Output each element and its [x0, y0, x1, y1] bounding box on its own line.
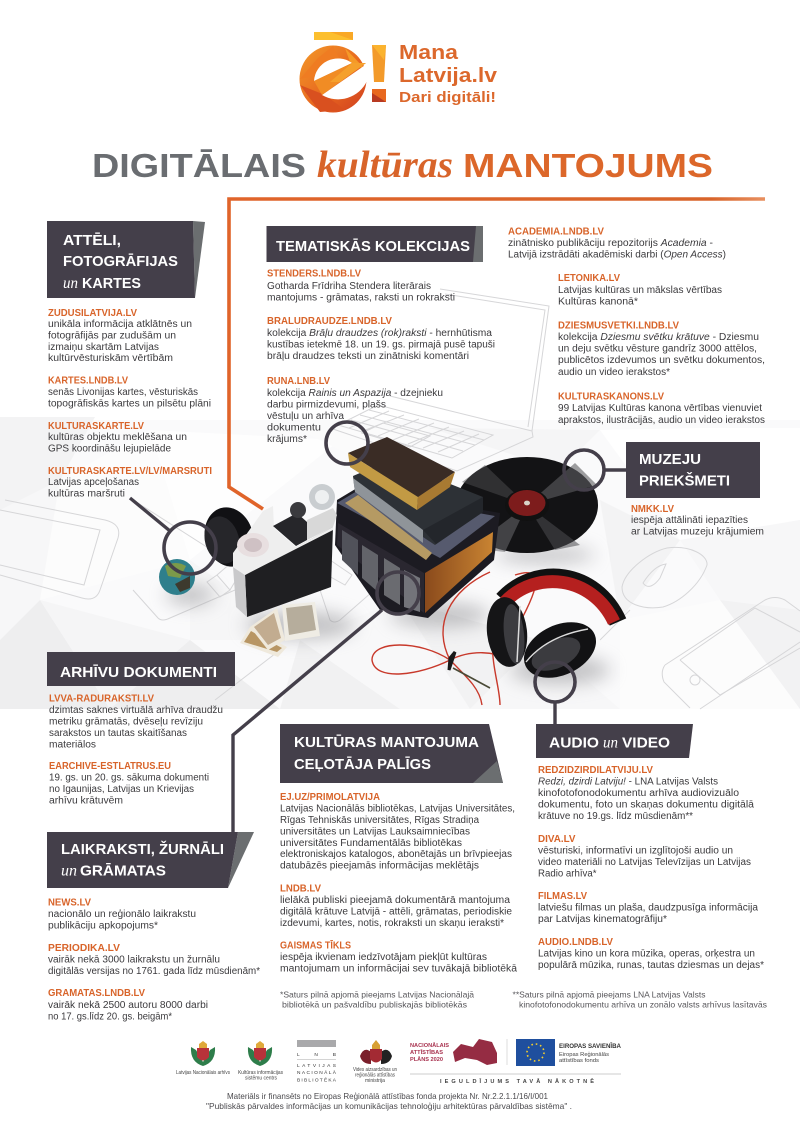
- text block: lvva: LVVA-RADURAKSTI.LV: [49, 694, 154, 704]
- text block: zudusilatvija: [48, 308, 192, 364]
- text block: letonika: Latvijas kultūras un mākslas vērtības: [558, 285, 722, 296]
- text block: redzidzirdilatviju: REDZIDZIRDILATVIJU.LV: [538, 765, 653, 776]
- text block: news: nacionālo un reģionālo laikrakstu: [48, 907, 196, 920]
- text block: braludraudze: kolekcija Brāļu draudzes (rok)raksti - hernhūtisma: [267, 328, 492, 339]
- text block: news: publikāciju apkopojums*: [48, 920, 158, 932]
- text block: lvva: dzimtas saknes virtuālā arhīva draudžu: [49, 705, 223, 716]
- logo: Latvijas Nacionālā bibliotēka: NACIONĀLĀ: [297, 1069, 337, 1076]
- logo: EU flag and Eiropas Savienība: attīstības fonds: [559, 1058, 599, 1064]
- shadows under objects: [166, 547, 610, 684]
- illustration: small old book: [348, 437, 455, 510]
- footnote: single asterisk: *Saturs pilnā apjomā pieejams Latvijas Nacionālajā: [280, 990, 474, 1000]
- text block: lndb: LNDB.LV: [280, 884, 321, 894]
- illustration: camera: [198, 484, 337, 617]
- text block: ej.uz/primolatvija: Latvijas Nacionālās bibliotēkas, Latvijas Universitātes,: [280, 804, 515, 814]
- text block: dziesmusvetki: un deju svētku vēsture gandrīz 3000 attēlos,: [558, 344, 757, 354]
- text block: redzidzirdilatviju: Redzi, dzirdi Latviju! - LNA Latvijas Valsts: [538, 776, 718, 788]
- text block: dziesmusvetki: publicētos izdevumos un svētku dokumentos,: [558, 355, 765, 366]
- text block: earchive: no Igaunijas, Latvijas un Krievijas: [49, 784, 194, 795]
- text block: gramatas: vairāk nekā 2500 autoru 8000 darbi: [48, 1000, 208, 1011]
- text block: academia: zinātnisko publikāciju repozitorijs Academia -: [508, 238, 713, 249]
- text block: redzidzirdilatviju: dokumentu, foto un skaņas dokumentu digitālā: [538, 800, 754, 810]
- title: [92, 144, 713, 186]
- panel: tematiskās kolekcijas: [266, 226, 495, 445]
- text block: runa: RUNA.LNB.LV: [267, 376, 330, 387]
- text block: kartes: senās Livonijas kartes, vēsturiskās: [48, 387, 198, 398]
- logo: Latvijas Nacionālā bibliotēka: BIBLIOTĒKA: [297, 1076, 337, 1084]
- text block: nmkk: ar Latvijas muzeju krājumiem: [631, 526, 764, 538]
- text block: zudusilatvija: ZUDUSILATVIJA.LV: [48, 308, 137, 319]
- slogan: ieguldījums tavā nākotnē: IEGULDĪJUMS TAVĀ NĀKOTNĒ: [440, 1078, 594, 1085]
- text block: runa: dokumentu: [267, 422, 321, 434]
- illustration: globe: [159, 559, 195, 595]
- logo: EU flag and Eiropas Savienība: EIROPAS SAVIENĪBA: [559, 1043, 622, 1050]
- text block: stenders: STENDERS.LNDB.LV: [267, 268, 361, 280]
- text block: gaismas tīkls: mantojumam un informācijai sev tuvākajā bibliotēkā: [280, 964, 517, 974]
- text block: maršruti: KULTURASKARTE.LV/LV/MARSRUTI: [48, 466, 212, 477]
- background: low-poly band: [0, 417, 800, 709]
- text block: academia: ACADEMIA.LNDB.LV: [508, 226, 604, 238]
- text block: earchive: [49, 761, 209, 806]
- text block: ej.uz/primolatvija: datubāzēs pieejamās informācijas meklētājs: [280, 860, 479, 872]
- heading: kultūras mantojuma ceļotāja palīgs: CEĻOTĀJA PALĪGS: [294, 756, 431, 773]
- heading: muzeju priekšmeti: PRIEKŠMETI: [639, 472, 730, 490]
- heading: muzeju priekšmeti: MUZEJU: [639, 451, 701, 468]
- heading: arhīvu dokumenti: [47, 652, 235, 686]
- panel: audio un video: [536, 724, 764, 971]
- line art: laptop: [330, 289, 549, 471]
- text block: periodika: digitālās versijas no 1761. gada līdz mūsdienām*: [48, 966, 260, 977]
- text block: audio.lndb: Latvijas kino un kora mūzika, operas, orķestra un: [538, 948, 755, 960]
- text block: filmas: [538, 891, 758, 925]
- text block: braludraudze: BRALUDRAUDZE.LNDB.LV: [267, 316, 392, 327]
- text block: stenders: Gotharda Frīdriha Stendera literārais: [267, 281, 431, 292]
- text block: nmkk: iespēja attālināti iepazīties: [631, 515, 748, 526]
- text block: periodika: vairāk nekā 3000 laikrakstu un žurnālu: [48, 954, 220, 966]
- heading: laikraksti, žurnāli un grāmatas: [47, 832, 254, 888]
- logo text: Dari digitāli!: [399, 90, 496, 106]
- text block: lndb: izdevumi, kartes, notis, rokraksti un skaņu ieraksti*: [280, 918, 504, 929]
- panel: laikraksti, žurnāli un grāmatas: [47, 832, 260, 1022]
- heading: arhīvu dokumenti: ARHĪVU DOKUMENTI: [60, 664, 217, 681]
- line art: left phone: [0, 500, 119, 599]
- logo: Latvijas Nacionālā bibliotēka: [297, 1040, 337, 1084]
- text block: gaismas tīkls: iespēja ikvienam iedzīvotājam piekļūt kultūras: [280, 952, 487, 963]
- text block: lndb: lielākā publiski pieejamā dokumentārā mantojuma: [280, 895, 510, 906]
- logo: Vides aizsardzības ministrija: ministrija: [365, 1078, 385, 1084]
- text block: news: [48, 898, 196, 932]
- logo: ē! Mana Latvija.lv: [300, 32, 498, 112]
- logo: Kultūras informācijas sistēmu centrs: [238, 1041, 283, 1082]
- logo: Latvijas Nacionālā bibliotēka: L N B: [297, 1052, 336, 1058]
- text block: gaismas tīkls: [280, 940, 517, 974]
- icon: Latvia map: [453, 1039, 497, 1065]
- text block: lndb: digitālā krātuve Latvijā - attēli, grāmatas, periodiskie: [280, 906, 512, 918]
- text block: earchive: 19. gs. un 20. gs. sākuma dokumenti: [49, 772, 209, 784]
- text block: dziesmusvetki: DZIESMUSVETKI.LNDB.LV: [558, 320, 679, 332]
- text block: redzidzirdilatviju: kinofotofonodokumentu arhīva audiovizuālo: [538, 788, 739, 799]
- icon: EU flag: [516, 1039, 555, 1066]
- heading: laikraksti, žurnāli un grāmatas: GRĀMATAS: [80, 862, 166, 880]
- logo text: Mana: [399, 42, 459, 64]
- text block: stenders: mantojums - grāmatas, raksti un rokraksti: [267, 292, 455, 304]
- heading: attēli: [47, 221, 205, 298]
- text block: kulturaskanons: aprakstos, ilustrācijās, audio un video ierakstos: [558, 415, 765, 426]
- text block: braludraudze: brāļu draudzes teksti un zinātniski komentāri: [267, 351, 469, 362]
- text block: dziesmusvetki: audio un video ierakstos*: [558, 367, 670, 378]
- text block: kulturaskarte: KULTURASKARTE.LV: [48, 421, 144, 432]
- heading: audio un video: un: [603, 734, 618, 752]
- text block: diva: vēsturiski, informatīvi un izglītojoši audio un: [538, 846, 733, 856]
- text block: ej.uz/primolatvija: EJ.UZ/PRIMOLATVIJA: [280, 792, 380, 803]
- text block: kartes: KARTES.LNDB.LV: [48, 376, 128, 386]
- text block: lvva: sarakstos un tautas skaitīšanas: [49, 728, 187, 739]
- text block: kulturaskanons: [558, 392, 765, 426]
- text block: kartes: [48, 376, 211, 410]
- text block: lndb: [280, 884, 512, 929]
- footnote: single asterisk: [280, 990, 474, 1010]
- logo: Latvijas Nacionālais arhīvs: Latvijas Nacionālais arhīvs: [176, 1070, 230, 1076]
- text block: kartes: topogrāfiskās kartes un pilsētu plāni: [48, 398, 211, 410]
- connector: vinyl circle: [564, 450, 626, 490]
- logo: Nacionālais attīstības plāns 2020: NACIONĀLAIS: [410, 1042, 449, 1049]
- heading: laikraksti, žurnāli un grāmatas: LAIKRAKSTI, ŽURNĀLI: [61, 840, 224, 858]
- title: MANTOJUMS: [463, 147, 713, 184]
- heading: laikraksti, žurnāli un grāmatas: un: [61, 862, 77, 880]
- text block: maršruti: Latvijas apceļošanas: [48, 477, 139, 488]
- logo text: [399, 42, 498, 106]
- footnote: double asterisk: **Saturs pilnā apjomā pieejams LNA Latvijas Valsts: [512, 990, 706, 1000]
- logo: Nacionālais attīstības plāns 2020: PLĀNS 2020: [410, 1056, 443, 1063]
- footnote: double asterisk: [512, 990, 767, 1010]
- connector: top book circle: [326, 422, 368, 464]
- heading: audio un video: VIDEO: [622, 734, 670, 752]
- heading: audio un video: AUDIO: [549, 734, 599, 752]
- text block: runa: darbu pirmizdevumi, plašs: [267, 400, 386, 410]
- text block: academia: [508, 226, 726, 260]
- text block: redzidzirdilatviju: [538, 765, 754, 822]
- text block: diva: [538, 834, 751, 880]
- text block: filmas: FILMAS.LV: [538, 891, 587, 902]
- text block: audio.lndb: populārā mūzika, runas, tautas dziesmas un dejas*: [538, 960, 764, 971]
- logo: Latvijas Nacionālā bibliotēka: LATVIJAS: [297, 1063, 336, 1069]
- text block: runa: [267, 376, 443, 445]
- text block: redzidzirdilatviju: krātuve no 19.gs. līdz mūsdienām**: [538, 811, 693, 822]
- logo: Latvijas Nacionālais arhīvs: [176, 1041, 230, 1076]
- funding note: [206, 1091, 572, 1111]
- text block: diva: DIVA.LV: [538, 834, 576, 845]
- text block: diva: video materiāli no Latvijas Televīzijas un Latvijas: [538, 857, 751, 868]
- title: kultūras: [317, 144, 453, 186]
- text block: kulturaskarte: [48, 421, 187, 454]
- footnote: single asterisk: bibliotēkā un pašvaldību publiskajās bibliotēkās: [282, 1000, 467, 1010]
- text block: maršruti: [48, 466, 212, 500]
- logo: Nacionālais attīstības plāns 2020: [410, 1039, 497, 1065]
- text block: audio.lndb: [538, 937, 764, 971]
- text block: letonika: [558, 273, 722, 308]
- logo: Kultūras informācijas sistēmu centrs: sistēmu centrs: [245, 1076, 277, 1082]
- text block: lvva: metriku grāmatās, dvēseļu revīziju: [49, 716, 203, 728]
- heading: attēli: un: [63, 275, 78, 292]
- text block: runa: kolekcija Rainis un Aspazija - dzejnieku: [267, 388, 443, 399]
- heading: kultūras mantojuma ceļotāja palīgs: KULTŪRAS MANTOJUMA: [294, 734, 479, 751]
- logo: Vides aizsardzības ministrija: [353, 1040, 397, 1084]
- footnote: double asterisk: kinofotofonodokumentu arhīva un zonālo valsts arhīvus lasītavās: [519, 1000, 767, 1010]
- text block: zudusilatvija: unikāla informācija atklātnēs un: [48, 319, 192, 330]
- panel: muzeju priekšmeti: [626, 442, 764, 538]
- line art: right phone: [662, 598, 800, 709]
- heading: attēli: ATTĒLI,: [63, 232, 121, 249]
- illustration: headphones and red cable: [372, 572, 618, 705]
- text block: letonika: LETONIKA.LV: [558, 273, 620, 284]
- text block: ej.uz/primolatvija: elektroniskajos katalogos, abonētajās un brīvpieejas: [280, 849, 512, 860]
- text block: audio.lndb: AUDIO.LNDB.LV: [538, 937, 613, 948]
- text block: braludraudze: [267, 316, 495, 362]
- text block: maršruti: kultūras maršruti: [48, 488, 125, 500]
- text block: earchive: EARCHIVE-ESTLATRUS.EU: [49, 761, 171, 772]
- text block: gramatas: [48, 988, 208, 1022]
- line art: mouse: [600, 547, 707, 640]
- illustration: video cassette: [353, 460, 483, 545]
- text block: ej.uz/primolatvija: [280, 792, 515, 872]
- text block: lvva: [49, 694, 223, 750]
- illustration: old photographs: [240, 602, 320, 657]
- text block: zudusilatvija: fotogrāfijās par zudušām un: [48, 330, 176, 342]
- text block: braludraudze: kustības ietekmē 18. un 19. gs. pirmajā pusē tapuši: [267, 340, 495, 350]
- text block: earchive: arhīvu krātuvēm: [49, 796, 123, 806]
- funding note: Materiāls ir finansēts no Eiropas Reģionālā attīstības fonda projekta Nr. Nr.2.2.1.1/16/I/001: [227, 1091, 548, 1101]
- text block: lvva: materiālos: [49, 740, 96, 750]
- line art: usb stick: [207, 562, 242, 597]
- text block: zudusilatvija: izmaiņu skartām Latvijas: [48, 342, 159, 353]
- text block: stenders: [267, 268, 455, 304]
- text block: kulturaskarte: kultūras objektu meklēšana un: [48, 432, 187, 443]
- heading: muzeju priekšmeti: [626, 442, 760, 498]
- text block: ej.uz/primolatvija: universitātes un Latvijas Lauksaimniecības: [280, 826, 470, 838]
- text block: gramatas: GRAMATAS.LNDB.LV: [48, 988, 145, 999]
- panel: arhīvu dokumenti: [47, 652, 235, 806]
- text block: ej.uz/primolatvija: universitātes Fundamentālās bibliotēkas: [280, 838, 462, 849]
- text block: runa: krājums*: [267, 434, 307, 445]
- heading: kultūras mantojuma ceļotāja palīgs: [280, 724, 503, 783]
- text block: dziesmusvetki: [558, 320, 765, 378]
- panel: kultūras mantojuma ceļotāja palīgs: [280, 724, 517, 974]
- text block: filmas: latviešu filmas un plaša, daudzpusīga informācija: [538, 902, 758, 914]
- text block: news: NEWS.LV: [48, 898, 91, 908]
- logo: Nacionālais attīstības plāns 2020: ATTĪSTĪBAS: [410, 1049, 443, 1056]
- connector: headphones circle: [535, 662, 575, 724]
- logo text: Latvija.lv: [399, 65, 498, 87]
- text block: ej.uz/primolatvija: Rīgas Tehniskās universitātes, Rīgas Stradiņa: [280, 815, 479, 826]
- heading: attēli: KARTES: [82, 275, 141, 292]
- logo: Kultūras informācijas sistēmu centrs: Kultūras informācijas: [238, 1070, 283, 1076]
- logo: EU flag and Eiropas Savienība: [507, 1039, 622, 1066]
- heading: tematiskās kolekcijas: TEMATISKĀS KOLEKCIJAS: [276, 238, 470, 255]
- text block: letonika: Kultūras kanonā*: [558, 296, 638, 308]
- line art: tablet under camera: [130, 498, 380, 700]
- illustration: large old book: [335, 488, 500, 618]
- text block: academia: Latvijā izstrādāti akadēmiski darbi (Open Access): [508, 250, 726, 260]
- icon: ē! logo mark: [300, 32, 386, 112]
- text block: diva: Radio arhīva*: [538, 868, 597, 880]
- text block: zudusilatvija: kultūrvēsturiskām vērtībām: [48, 353, 173, 364]
- title: DIGITĀLAIS: [92, 147, 306, 184]
- text block: gramatas: no 17. gs.līdz 20. gs. beigām*: [48, 1012, 172, 1022]
- logo: EU flag and Eiropas Savienība: Eiropas Reģionālās: [559, 1051, 609, 1058]
- text block: periodika: PERIODIKA.LV: [48, 943, 120, 954]
- heading: audio un video: [536, 724, 693, 758]
- connector: large book circle: [233, 572, 419, 832]
- heading: tematiskās kolekcijas: [266, 226, 483, 262]
- text block: dziesmusvetki: kolekcija Dziesmu svētku krātuve - Dziesmu: [558, 332, 759, 343]
- logo: Vides aizsardzības ministrija: reģionālās attīstības: [355, 1072, 395, 1078]
- text block: gaismas tīkls: GAISMAS TĪKLS: [280, 940, 351, 952]
- orange connector line: [229, 199, 765, 509]
- text block: filmas: par Latvijas kinematogrāfiju*: [538, 914, 667, 925]
- illustration: vinyl record: [456, 457, 598, 553]
- text block: kulturaskanons: KULTURASKANONS.LV: [558, 392, 664, 402]
- funding note: "Publiskās pārvaldes informācijas un komunikācijas tehnoloģiju arhitektūras pārvaldības sistēma" .: [206, 1101, 572, 1111]
- text block: nmkk: [631, 504, 764, 538]
- text block: nmkk: NMKK.LV: [631, 504, 674, 515]
- text block: kulturaskarte: GPS koordināšu lejupielāde: [48, 444, 171, 454]
- connector circles and lines: [130, 422, 626, 832]
- text block: runa: vēstuļu un arhīva: [267, 411, 344, 422]
- text block: periodika: [48, 943, 260, 977]
- panel: attēli, fotogrāfijas un kartes: [47, 221, 212, 500]
- text block: kulturaskanons: 99 Latvijas Kultūras kanona vērtības vienuviet: [558, 403, 762, 414]
- logo: Vides aizsardzības ministrija: Vides aizsardzības un: [353, 1067, 397, 1073]
- heading: attēli: FOTOGRĀFIJAS: [63, 253, 178, 270]
- connector: camera circle: [130, 498, 216, 574]
